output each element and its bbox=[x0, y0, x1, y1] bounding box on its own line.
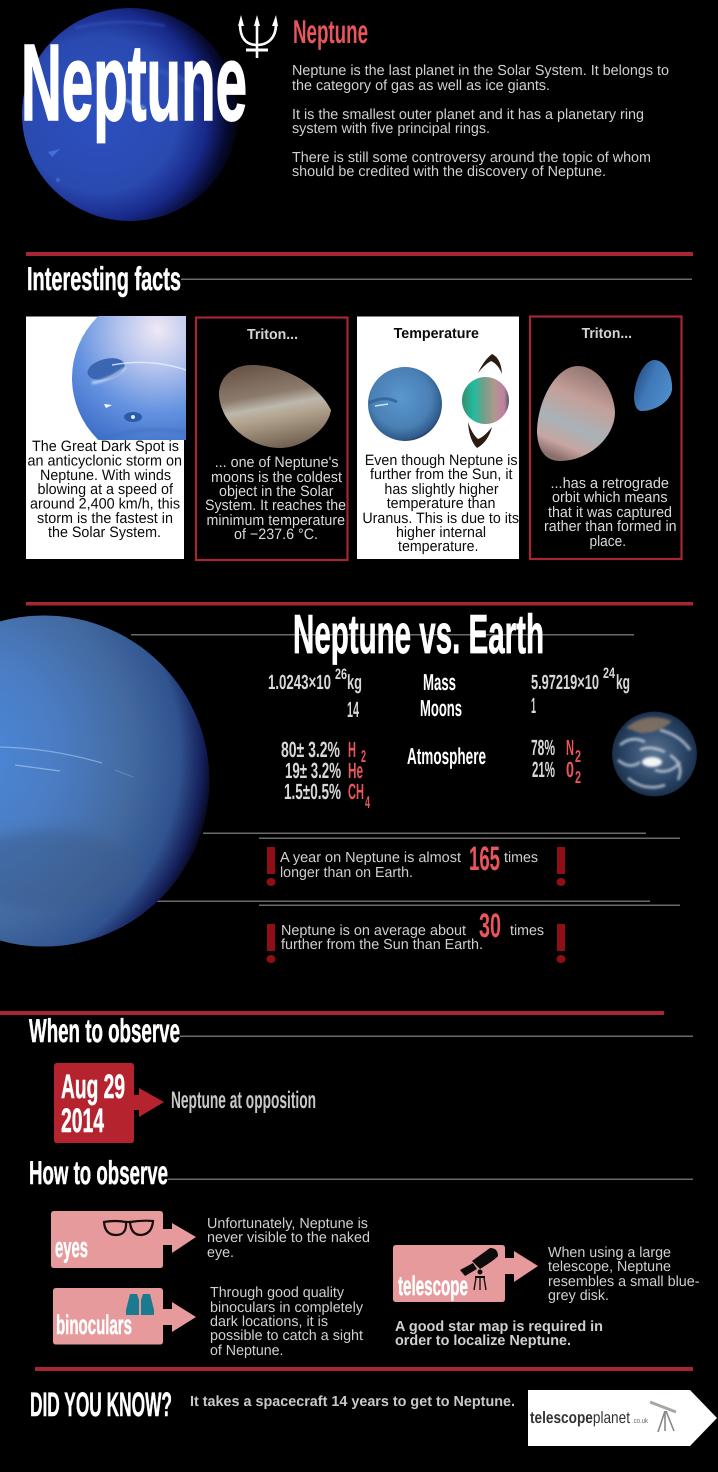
intro text block: the category of gas as well as ice giants. bbox=[292, 78, 550, 94]
text: telescope: telescope, Neptune bbox=[548, 1259, 671, 1275]
row: Mass: kg bbox=[347, 671, 362, 694]
image: Triton moon bbox=[219, 365, 331, 448]
text: eyes: eye. bbox=[207, 1245, 234, 1261]
heading: Interesting facts: Interesting facts bbox=[27, 260, 181, 297]
icon: trident symbol bbox=[238, 15, 278, 58]
text: Neptune at opposition: Neptune at opposition bbox=[171, 1087, 316, 1114]
text: binoculars: Through good quality bbox=[210, 1285, 345, 1301]
panel: Great Dark Spot: blowing at a speed of bbox=[38, 481, 174, 498]
icon: exclamation marks, fact two bbox=[266, 924, 566, 963]
row: Mass: kg bbox=[616, 671, 630, 694]
row: Atmosphere: Atmosphere bbox=[407, 743, 486, 769]
icon: exclamation marks, fact one bbox=[266, 847, 566, 886]
row: Atmosphere: N bbox=[566, 735, 574, 760]
row: Mass: 24 bbox=[603, 665, 615, 682]
panel: Great Dark Spot: around 2,400 km/h, this bbox=[30, 496, 180, 512]
text: telescope: When using a large bbox=[548, 1245, 671, 1261]
row: Atmosphere: 19± 3.2% bbox=[285, 758, 341, 783]
callout: 30 times bbox=[281, 907, 544, 953]
callout: 165 times: 165 bbox=[469, 840, 500, 878]
date arrow box bbox=[54, 1063, 164, 1143]
panel: Triton coldest object: ... one of Neptune's bbox=[215, 454, 338, 471]
title: Neptune: Neptune bbox=[21, 22, 247, 144]
row: Atmosphere: 4 bbox=[365, 793, 370, 812]
image: Triton and Neptune bbox=[537, 360, 672, 461]
text: star map note bbox=[395, 1319, 603, 1349]
heading: Neptune intro: Neptune bbox=[293, 13, 368, 50]
text: binoculars: dark locations, it is bbox=[210, 1314, 328, 1330]
row: Atmosphere: 2 bbox=[575, 768, 581, 787]
comparison table bbox=[268, 665, 630, 812]
panel: Temperature bbox=[357, 316, 519, 559]
intro text block: There is still some controversy around the topic of whom bbox=[292, 150, 651, 166]
panel: Great Dark Spot: the Solar System. bbox=[48, 524, 161, 541]
panel: Triton coldest object: Triton... bbox=[247, 327, 298, 343]
text: spacecraft fact: It takes a spacecraft 14 years to get to Neptune. bbox=[190, 1394, 515, 1410]
intro text block: system with five principal rings. bbox=[292, 121, 490, 137]
row: Atmosphere: 0 bbox=[566, 757, 574, 782]
intro text block: should be credited with the discovery of Neptune. bbox=[292, 164, 606, 180]
callout: 30 times: times bbox=[510, 923, 544, 939]
intro text block bbox=[292, 63, 669, 180]
panel: Temperature: has slightly higher bbox=[384, 481, 499, 498]
row: Atmosphere: He bbox=[348, 758, 363, 783]
arrow box: eyes bbox=[51, 1211, 196, 1268]
row: Atmosphere: 21% bbox=[532, 757, 555, 782]
text: eyes: never visible to the naked bbox=[207, 1230, 370, 1246]
text: telescope bbox=[548, 1245, 700, 1304]
row: Mass: 5.97219×10 bbox=[531, 671, 599, 694]
logo: telescopeplanet: telescopeplanet bbox=[530, 1409, 630, 1427]
panel: Triton coldest object: System. It reaches the bbox=[205, 497, 346, 514]
date arrow box: Aug 29 bbox=[61, 1068, 125, 1106]
row: Moons bbox=[347, 693, 536, 722]
row: Atmosphere: 80± 3.2% bbox=[281, 737, 340, 762]
row: Atmosphere: H bbox=[348, 737, 356, 762]
arrow box: binoculars bbox=[53, 1288, 196, 1344]
row: Moons: Moons bbox=[420, 695, 462, 721]
text: eyes bbox=[207, 1216, 370, 1261]
image: large Neptune bbox=[0, 616, 210, 946]
row: Mass: 1.0243×10 bbox=[268, 671, 331, 694]
panel: Triton retrograde orbit: orbit which means bbox=[552, 489, 668, 506]
panel: Great Dark Spot: Neptune. With winds bbox=[40, 467, 171, 484]
arrow box: eyes: eyes bbox=[55, 1232, 88, 1263]
panel: Triton coldest object: of −237.6 °C. bbox=[234, 526, 318, 543]
panel: Temperature: Temperature bbox=[394, 326, 479, 342]
panel: Triton coldest object: object in the Solar bbox=[219, 483, 334, 500]
row: Mass bbox=[268, 665, 630, 695]
callout: 30 times: 30 bbox=[479, 907, 501, 945]
panel: Triton coldest object: moons is the coldest bbox=[211, 469, 343, 486]
panel: Great Dark Spot: storm is the fastest in bbox=[37, 510, 173, 527]
date arrow box: 2014 bbox=[61, 1102, 104, 1140]
row: Moons: 14 bbox=[347, 697, 359, 722]
row: Atmosphere: 1.5±0.5% bbox=[284, 779, 341, 804]
text: binoculars: possible to catch a sight bbox=[210, 1328, 363, 1344]
panel: Temperature: Even though Neptune is bbox=[365, 452, 518, 469]
image: Earth bbox=[612, 712, 697, 796]
text: binoculars: binoculars in completely bbox=[210, 1300, 364, 1316]
callout: 165 times: longer than on Earth. bbox=[280, 865, 413, 881]
text: binoculars: of Neptune. bbox=[210, 1343, 284, 1359]
arrow box: telescope: telescope bbox=[398, 1271, 468, 1301]
row: Atmosphere: 2 bbox=[361, 747, 366, 766]
panel: Triton retrograde orbit bbox=[530, 316, 682, 559]
panel: Triton retrograde orbit: ...has a retrograde bbox=[550, 475, 669, 492]
heading: How to observe: How to observe bbox=[29, 1154, 168, 1191]
row: Atmosphere: 78% bbox=[531, 735, 555, 760]
icon: glasses bbox=[104, 1221, 153, 1235]
callout: 165 times: times bbox=[504, 850, 538, 866]
panel: Temperature: further from the Sun, it bbox=[370, 466, 513, 483]
panel: Great Dark Spot bbox=[26, 316, 186, 559]
row: Atmosphere: CH bbox=[348, 779, 364, 804]
callout: 165 times bbox=[280, 840, 538, 881]
image: Neptune close-up bbox=[72, 316, 186, 440]
arrow box: binoculars: binoculars bbox=[56, 1310, 132, 1340]
panel: Great Dark Spot: The Great Dark Spot is bbox=[32, 438, 179, 455]
intro text block: It is the smallest outer planet and it has a planetary ring bbox=[292, 107, 644, 123]
callout: 30 times: further from the Sun than Earth. bbox=[281, 937, 483, 953]
heading: Did you know: DID YOU KNOW? bbox=[30, 1386, 172, 1424]
panel: Triton retrograde orbit: rather than formed in bbox=[544, 518, 677, 535]
icon: binoculars bbox=[126, 1294, 154, 1315]
panel: Temperature: Uranus. This is due to its bbox=[362, 510, 519, 527]
text: telescope: resembles a small blue- bbox=[548, 1274, 700, 1290]
icon: logo telescope bbox=[650, 1402, 676, 1432]
text: eyes: Unfortunately, Neptune is bbox=[207, 1216, 368, 1232]
panel: Triton coldest object: minimum temperature bbox=[206, 512, 345, 529]
panel: Temperature: higher internal bbox=[396, 524, 486, 541]
text: star map note: order to localize Neptune. bbox=[395, 1333, 571, 1349]
callout: 165 times: A year on Neptune is almost bbox=[280, 850, 461, 866]
panel: Temperature: temperature than bbox=[387, 495, 495, 512]
row: Atmosphere bbox=[281, 735, 581, 812]
panel: Triton retrograde orbit: Triton... bbox=[582, 326, 632, 342]
row: Mass: 26 bbox=[335, 666, 347, 683]
heading: When to observe: When to observe bbox=[29, 1012, 180, 1049]
row: Mass: Mass bbox=[423, 669, 456, 695]
panel: Triton coldest object bbox=[196, 318, 348, 560]
panel: Triton retrograde orbit: that it was captured bbox=[548, 504, 672, 521]
panel: Great Dark Spot: an anticyclonic storm on bbox=[28, 452, 182, 470]
arrow box: telescope bbox=[393, 1245, 538, 1302]
image: Uranus with rings bbox=[462, 354, 509, 448]
row: Atmosphere: 2 bbox=[575, 747, 581, 766]
logo: telescopeplanet bbox=[528, 1390, 717, 1446]
panel: Triton retrograde orbit: place. bbox=[590, 533, 626, 550]
icon: telescope bbox=[460, 1248, 498, 1290]
hero planet image bbox=[22, 8, 238, 221]
logo: telescopeplanet: .co.uk bbox=[632, 1416, 648, 1425]
intro text block: Neptune is the last planet in the Solar System. It belongs to bbox=[292, 63, 669, 79]
text: telescope: grey disk. bbox=[548, 1288, 609, 1304]
image: Neptune small bbox=[368, 367, 442, 441]
panel: Temperature: temperature. bbox=[398, 538, 478, 555]
comparison table: 1 bbox=[531, 693, 536, 718]
text: binoculars bbox=[210, 1285, 364, 1359]
text: star map note: A good star map is required in bbox=[395, 1319, 603, 1335]
callout: 30 times: Neptune is on average about bbox=[281, 923, 466, 939]
